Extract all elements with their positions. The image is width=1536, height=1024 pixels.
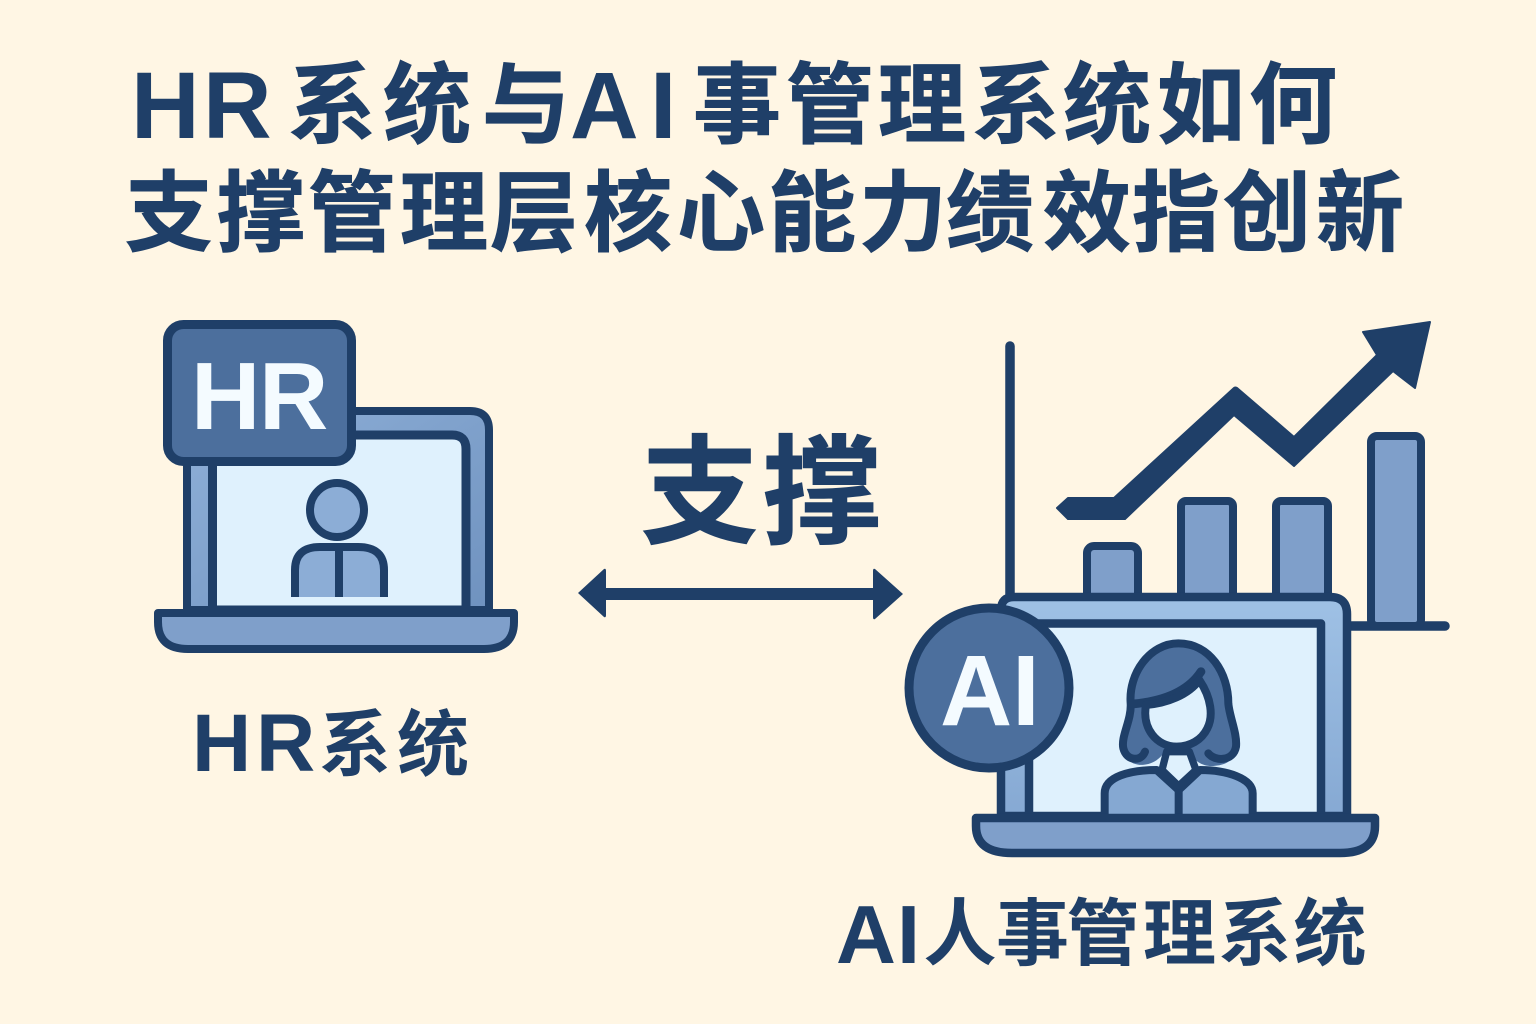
title: HR xyxy=(131,53,272,159)
laptop base xyxy=(976,818,1375,853)
title xyxy=(125,53,1404,263)
HR badge: HR xyxy=(191,343,328,450)
HR badge xyxy=(168,324,352,462)
bangs xyxy=(1132,672,1201,704)
hair outline xyxy=(1123,643,1236,759)
shoulders xyxy=(1105,770,1253,820)
heading: HR system label: 系统 xyxy=(319,706,469,786)
icon: HR laptop xyxy=(158,324,514,649)
laptop screen xyxy=(1029,624,1321,816)
title: 系统与 xyxy=(288,56,570,155)
AI badge: AI xyxy=(940,635,1040,747)
heading: HR system label: HR xyxy=(192,698,315,789)
laptop frame xyxy=(187,411,489,610)
heading: AI HR system label: 人事管理系统 xyxy=(924,894,1366,975)
support label: 支撑 xyxy=(641,428,881,560)
heading: HR system label xyxy=(192,698,469,789)
laptop base xyxy=(158,613,514,649)
woman icon xyxy=(1105,643,1253,820)
hair fill xyxy=(1123,643,1236,766)
laptop frame xyxy=(1001,597,1347,816)
chart: growth xyxy=(1010,322,1445,626)
icon: AI laptop xyxy=(909,597,1375,853)
face xyxy=(1145,680,1211,747)
title: 支撑管理层核心能力绩效指创新 xyxy=(125,164,1404,263)
arrow: double-headed xyxy=(578,569,903,619)
person icon xyxy=(295,483,384,597)
title: 事管理系统如何 xyxy=(693,56,1337,155)
AI badge xyxy=(909,608,1069,768)
heading: AI HR system label: AI xyxy=(836,888,920,981)
title: AI xyxy=(570,53,676,159)
bars xyxy=(1087,436,1421,626)
chart axes xyxy=(1010,346,1445,626)
laptop screen xyxy=(212,435,466,610)
neck xyxy=(1162,752,1196,786)
collar line xyxy=(1167,790,1191,820)
trend arrow xyxy=(1057,322,1430,519)
